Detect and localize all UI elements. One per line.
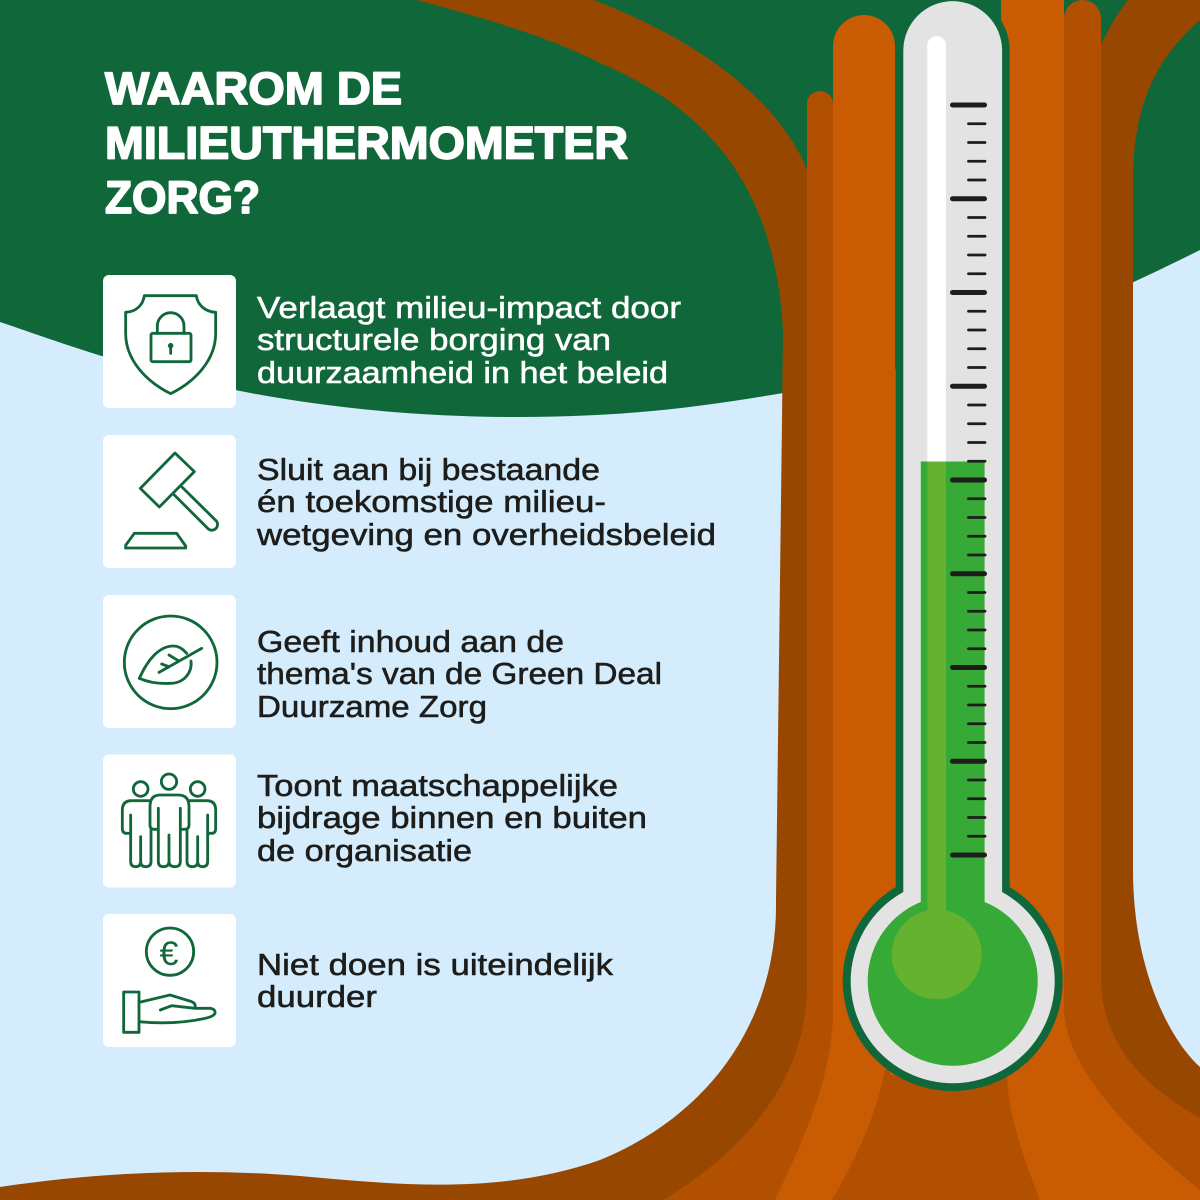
title: WAAROM DE <box>105 63 402 114</box>
liquid highlight <box>892 462 982 999</box>
icon card: hand with euro coin: € <box>160 935 179 973</box>
trunk: orange behind bulb <box>890 880 1010 1075</box>
text: cost <box>257 948 614 1014</box>
text: legislation: Sluit aan bij bestaande <box>257 453 600 487</box>
icon card: gavel <box>103 435 236 568</box>
title <box>105 63 628 223</box>
text: green deal: Duurzame Zorg <box>257 690 487 724</box>
trunk: orange seam behind thermometer <box>890 369 900 889</box>
item 4: society <box>103 754 647 888</box>
trunk: orange left strip <box>775 15 895 1200</box>
thermometer <box>843 0 1063 1091</box>
text: legislation: én toekomstige milieu- <box>257 485 606 519</box>
trunk: orange right strip <box>1001 0 1200 1200</box>
text: society: de organisatie <box>257 834 472 868</box>
icon card: hand with euro coin <box>103 914 236 1047</box>
title: MILIEUTHERMOMETER <box>105 118 628 168</box>
title: ZORG? <box>105 172 260 223</box>
thermometer liquid <box>868 462 1038 1066</box>
thermometer glass <box>851 1 1055 1083</box>
trunk: dark right branch <box>1101 0 1200 1125</box>
scale: major ticks <box>952 105 984 855</box>
text: green deal <box>257 625 662 724</box>
item 1: impact <box>103 275 681 408</box>
text: impact: Verlaagt milieu-impact door <box>257 291 681 325</box>
text: society <box>257 769 647 868</box>
icon card: shield with lock <box>103 275 236 408</box>
text: cost: Niet doen is uiteindelijk <box>257 948 614 982</box>
text: legislation: wetgeving en overheidsbeleid <box>256 518 716 552</box>
text: green deal: thema's van de Green Deal <box>257 657 662 691</box>
text: impact <box>257 291 681 390</box>
item 3: green deal <box>103 595 662 728</box>
icon card: people <box>103 754 236 888</box>
item 2: legislation <box>103 435 716 568</box>
thermometer outline <box>843 0 1063 1091</box>
scale: minor ticks <box>968 124 985 836</box>
text: society: bijdrage binnen en buiten <box>257 801 647 835</box>
text: green deal: Geeft inhoud aan de <box>257 625 564 659</box>
icon card: leaf <box>103 595 236 728</box>
text: impact: duurzaamheid in het beleid <box>257 356 668 390</box>
trunk: mid centre base <box>830 1040 1055 1200</box>
text: impact: structurele borging van <box>257 323 611 357</box>
trunk: dark left branch and base <box>0 0 850 1200</box>
item 5: cost <box>103 914 614 1047</box>
text: legislation <box>256 453 716 552</box>
trunk: mid right strip <box>1064 0 1200 1200</box>
tree canopy <box>0 0 1200 417</box>
text: cost: duurder <box>257 980 377 1014</box>
thermometer highlight <box>927 36 946 462</box>
text: society: Toont maatschappelijke <box>257 769 618 803</box>
trunk: mid left strip <box>663 91 850 1200</box>
